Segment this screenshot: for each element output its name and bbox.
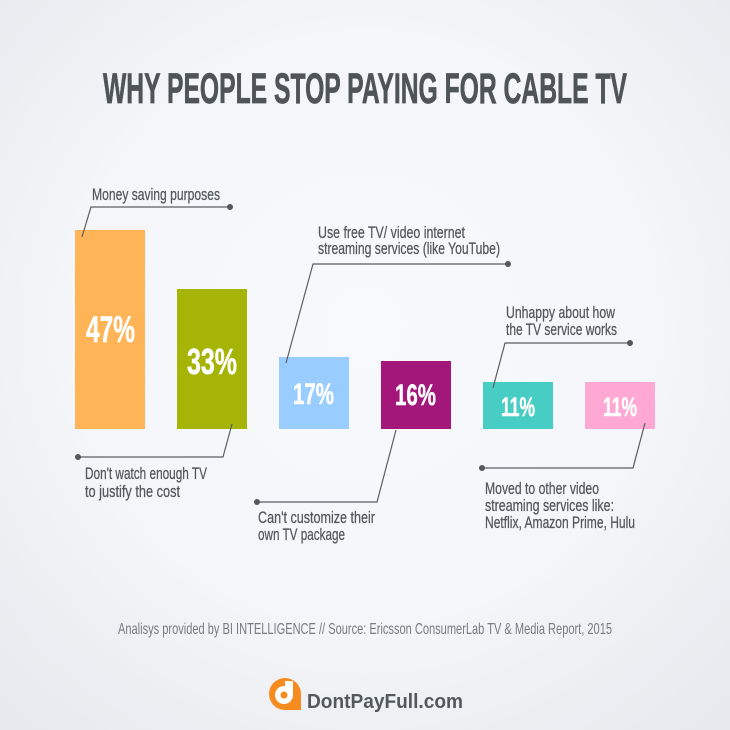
callout: other streaming: Netflix, Amazon Prime, Hulu	[485, 514, 635, 532]
callout: not enough tv: Don't watch enough TV	[85, 465, 207, 483]
bar chart	[75, 230, 655, 429]
callout: money saving	[82, 186, 233, 237]
callout: other streaming: Moved to other video	[485, 480, 599, 498]
callout: unhappy: Unhappy about how	[506, 304, 615, 322]
callout: unhappy: the TV service works	[506, 321, 617, 339]
bar: 16%	[381, 361, 451, 429]
callout: other streaming	[479, 423, 645, 532]
callout: customize	[254, 430, 396, 544]
callout: free streaming	[286, 224, 511, 363]
callout: customize: own TV package	[258, 526, 345, 544]
bar: 33%	[177, 289, 247, 429]
callout: free streaming: streaming services (like YouTube)	[318, 240, 500, 258]
callout: customize: Can't customize their	[258, 509, 375, 527]
bar: 17%: 17%	[293, 378, 334, 411]
callout: not enough tv: to justify the cost	[85, 483, 180, 501]
bar: 11% teal: 11%	[501, 392, 535, 422]
bar: 11% teal	[483, 382, 553, 429]
callout: not enough tv	[75, 424, 232, 501]
bar: 47%	[75, 230, 145, 429]
callout: free streaming: Use free TV/ video internet	[318, 224, 465, 242]
callout: unhappy	[493, 304, 633, 388]
bar: 17%	[279, 357, 349, 429]
logo	[269, 678, 463, 713]
bar: 11% pink	[585, 382, 655, 429]
bar: 47%: 47%	[86, 309, 135, 350]
bar: 33%: 33%	[187, 341, 237, 382]
icon: logo mark	[269, 678, 301, 710]
callout: money saving: Money saving purposes	[92, 186, 220, 204]
bar: 11% pink: 11%	[603, 392, 637, 422]
bar: 16%: 16%	[395, 379, 436, 412]
callout: other streaming: streaming services like:	[485, 497, 614, 515]
logo wordmark: DontPayFull.com	[307, 691, 463, 713]
